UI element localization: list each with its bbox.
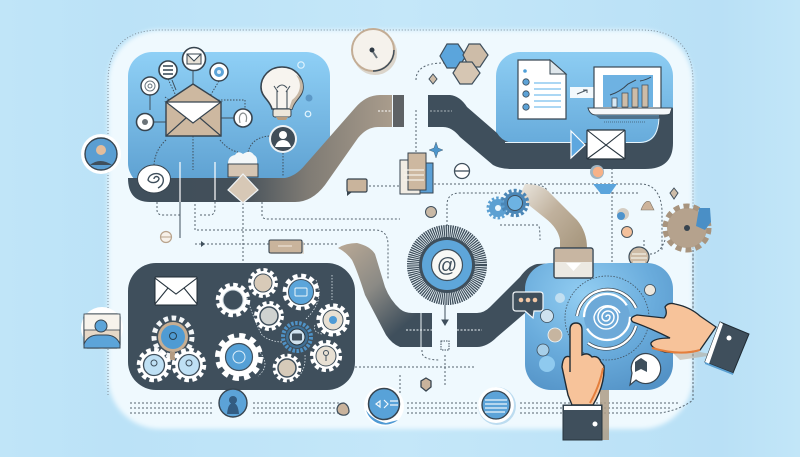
icon network lines bbox=[145, 70, 283, 176]
gear 3 bbox=[285, 276, 317, 308]
icon: at-sign seal bbox=[414, 232, 480, 298]
panel: top-right blue card bbox=[428, 52, 673, 169]
icon: triangle arrow bbox=[571, 131, 585, 158]
white markers on road bbox=[180, 162, 215, 202]
icon: blue trapezoid bbox=[593, 184, 617, 194]
icon: right gear bbox=[665, 206, 711, 250]
road joint bbox=[393, 95, 404, 127]
gear 1 bbox=[218, 285, 248, 315]
road: curved taupe top-right bbox=[520, 184, 587, 248]
road joint marks bbox=[378, 110, 452, 112]
gear 2 bbox=[250, 270, 276, 296]
road: dark band wrapping card bbox=[428, 95, 673, 169]
icon: taupe bar bbox=[269, 240, 304, 254]
icon: list bubble bbox=[159, 61, 177, 79]
icon: envelope bbox=[166, 84, 221, 136]
white edge line bbox=[505, 118, 659, 142]
gear 4 bbox=[256, 303, 282, 329]
icon: spiral bbox=[138, 165, 170, 193]
gear 10 bbox=[154, 318, 192, 360]
icon: dot bubble bbox=[136, 114, 154, 130]
icon: taupe lined circle bbox=[629, 247, 649, 267]
icon: spiral target bbox=[565, 276, 649, 360]
icon: cloud box bbox=[228, 152, 258, 203]
panel: bottom-right blue card bbox=[525, 263, 673, 390]
gear connections bbox=[247, 275, 332, 378]
gear 9 big bbox=[218, 336, 260, 378]
arrow: centre down bbox=[442, 305, 448, 325]
icon: envelope bbox=[155, 277, 197, 305]
icon: orange dot bbox=[590, 165, 604, 179]
arrow: left of bar bbox=[201, 241, 205, 247]
gear 6 bbox=[318, 306, 348, 334]
sketch: small chat tag bbox=[347, 179, 367, 196]
road joint marks lower bbox=[406, 313, 482, 347]
panel: top-left blue card bbox=[128, 48, 404, 238]
icon: minus circle small bbox=[160, 232, 172, 242]
icon: at-sign seal: @ bbox=[437, 255, 457, 277]
road: lower centre left bbox=[338, 243, 432, 347]
icon: pointing hand (right) bbox=[631, 303, 749, 375]
icon: person bubble bbox=[269, 125, 297, 153]
icon: chat arrows badge bbox=[364, 386, 404, 426]
small ornaments bbox=[298, 62, 312, 117]
icon: stacked documents bbox=[400, 153, 433, 194]
icon: fingerprint bubble bbox=[234, 109, 252, 127]
icon: diamond bbox=[429, 74, 437, 84]
icon: left ID badge bbox=[81, 307, 123, 349]
dotted frame bbox=[108, 30, 693, 395]
icon: target bubble bbox=[210, 63, 228, 81]
small ornaments right bbox=[617, 188, 678, 238]
icon: chat house bubble bbox=[630, 354, 661, 385]
icon: bottom list badge bbox=[478, 387, 516, 425]
connector lines bbox=[130, 63, 693, 417]
icon: hexagon cluster bbox=[440, 44, 488, 84]
icon: document bbox=[518, 60, 566, 119]
icon: small sparkle bbox=[429, 142, 443, 158]
icon: laptop with bar chart bbox=[588, 67, 672, 122]
icon: top centre dial bbox=[352, 29, 397, 75]
icon: pointing hand (bottom) bbox=[562, 323, 609, 440]
road: lower centre right bbox=[457, 263, 560, 347]
icon: envelope bbox=[587, 130, 625, 159]
central light panel bbox=[108, 30, 693, 429]
icon: bottom pebble bbox=[337, 403, 349, 415]
panel: dark gear card bbox=[128, 263, 355, 390]
icon: mail bubble bbox=[182, 48, 206, 70]
icon: minus circle bbox=[454, 164, 470, 178]
small card icons bbox=[537, 284, 656, 372]
road: dark to taupe band bbox=[128, 95, 392, 202]
icon: chat bubble dots bbox=[513, 292, 543, 318]
icon: small hex tag bbox=[421, 378, 431, 391]
icon: left person badge top bbox=[81, 134, 121, 174]
cuff bbox=[705, 322, 749, 373]
icon: bottom person bbox=[219, 389, 247, 417]
gear 8 bbox=[274, 356, 300, 380]
cuff bbox=[563, 405, 602, 440]
gear 11 bbox=[139, 350, 169, 380]
icon: taupe dot bbox=[426, 206, 436, 218]
gear 5 bbox=[283, 323, 311, 351]
icon: light bulb bbox=[261, 67, 303, 120]
arrow strip bbox=[570, 87, 594, 98]
icon: swirl bubble bbox=[141, 77, 159, 95]
icon: download box bbox=[554, 248, 593, 278]
gear 7 bbox=[312, 342, 340, 370]
gear 12 bbox=[174, 350, 204, 380]
icon: blue gears bbox=[488, 190, 528, 218]
icon: lower cross bbox=[441, 341, 449, 350]
